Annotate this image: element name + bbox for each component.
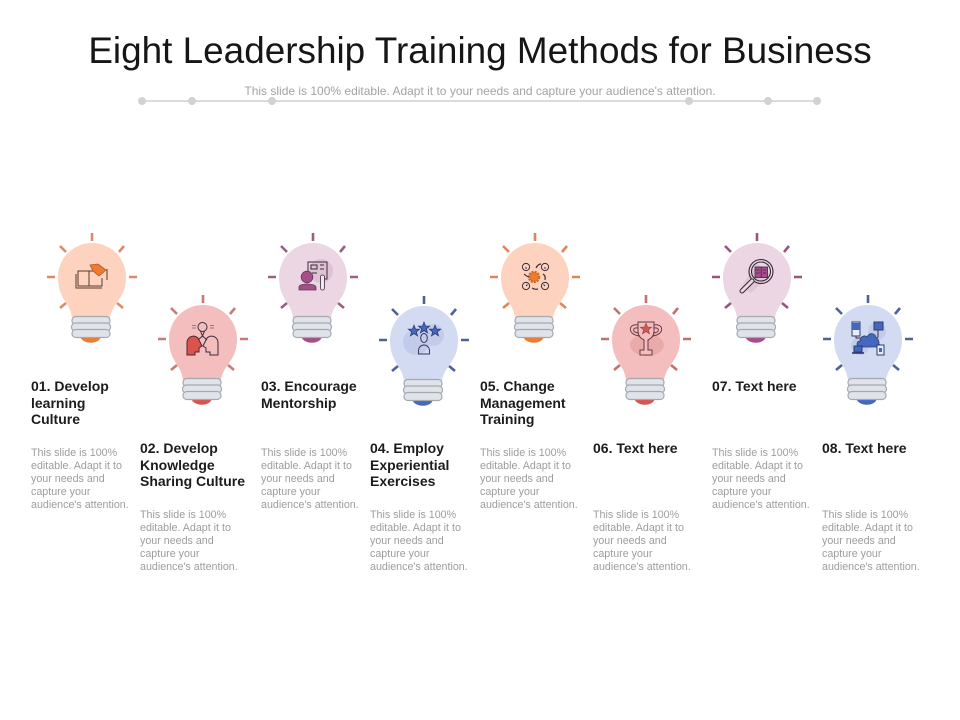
icon: person with board <box>299 262 327 290</box>
item 07 heading: 07. Text here <box>712 378 797 394</box>
item 02 text: capture your <box>140 548 199 560</box>
item 04 text <box>370 509 468 573</box>
item 07 text: This slide is 100% <box>712 447 798 459</box>
bulb 7: magnifier and book <box>712 233 802 343</box>
item 05 text: capture your <box>480 486 539 498</box>
item 01 text: audience's attention. <box>31 499 129 511</box>
item 05 heading: Management <box>480 394 566 410</box>
icon: trophy <box>630 322 662 355</box>
bulb 1: book and graduation cap <box>47 233 137 343</box>
item 02 text <box>140 509 238 573</box>
item 04 heading: 04. Employ <box>370 440 444 456</box>
item 03 heading: Mentorship <box>261 394 336 410</box>
bulb 6: trophy <box>601 295 691 405</box>
item 05 text: editable. Adapt it to <box>480 460 571 472</box>
item 02 heading: Knowledge <box>140 456 215 472</box>
item 08 text: editable. Adapt it to <box>822 522 913 534</box>
bulb 3: mentor board <box>268 233 358 343</box>
item 02 text: audience's attention. <box>140 561 238 573</box>
item 01 text: editable. Adapt it to <box>31 460 122 472</box>
item 04 heading: Exercises <box>370 473 435 489</box>
item 01 text: your needs and <box>31 473 105 485</box>
item 07 text: editable. Adapt it to <box>712 460 803 472</box>
item 06 heading: 06. Text here <box>593 440 678 456</box>
item 02 heading: 02. Develop <box>140 440 218 456</box>
item 07 text <box>712 447 810 511</box>
item 03 heading: 03. Encourage <box>261 378 357 394</box>
item 05 text: audience's attention. <box>480 499 578 511</box>
item 08 text: audience's attention. <box>822 561 920 573</box>
item 05 text <box>480 447 578 511</box>
item 02 text: editable. Adapt it to <box>140 522 231 534</box>
item 05 heading <box>480 378 566 427</box>
item 05 text: your needs and <box>480 473 554 485</box>
icon: book and cap <box>76 264 107 288</box>
item 04 heading <box>370 440 449 489</box>
item 07 text: audience's attention. <box>712 499 810 511</box>
bulb 4: stars over person <box>379 296 469 406</box>
item 06 text: your needs and <box>593 535 667 547</box>
item 02 text: your needs and <box>140 535 214 547</box>
item 01 text: capture your <box>31 486 90 498</box>
item 04 text: capture your <box>370 548 429 560</box>
item 04 heading: Experiential <box>370 456 449 472</box>
item 08 heading: 08. Text here <box>822 440 907 456</box>
item 05 text: This slide is 100% <box>480 447 566 459</box>
item 03 text: capture your <box>261 486 320 498</box>
item 05 heading: 05. Change <box>480 378 555 394</box>
item 08 text: This slide is 100% <box>822 509 908 521</box>
item 05 heading: Training <box>480 411 534 427</box>
title: Eight Leadership Training Methods for Business <box>88 30 872 71</box>
icon: two heads and light bulb <box>187 322 218 355</box>
item 02 text: This slide is 100% <box>140 509 226 521</box>
item 07 text: capture your <box>712 486 771 498</box>
item 06 text: capture your <box>593 548 652 560</box>
item 01 heading: learning <box>31 394 85 410</box>
item 04 text: This slide is 100% <box>370 509 456 521</box>
item 03 text: your needs and <box>261 473 335 485</box>
item 08 text <box>822 509 920 573</box>
item 04 text: editable. Adapt it to <box>370 522 461 534</box>
item 08 text: capture your <box>822 548 881 560</box>
item 06 text: editable. Adapt it to <box>593 522 684 534</box>
item 06 text: audience's attention. <box>593 561 691 573</box>
item 03 text: editable. Adapt it to <box>261 460 352 472</box>
bulb 2: sharing knowledge heads <box>158 295 248 405</box>
item 01 heading <box>31 378 109 427</box>
item 04 text: your needs and <box>370 535 444 547</box>
item 06 text: This slide is 100% <box>593 509 679 521</box>
item 03 text: This slide is 100% <box>261 447 347 459</box>
bulb 5: change management cycle <box>490 233 580 343</box>
item 03 text: audience's attention. <box>261 499 359 511</box>
item 03 heading <box>261 378 357 411</box>
item 03 text <box>261 447 359 511</box>
subtitle timeline <box>138 97 821 105</box>
icon: magnifier <box>742 260 773 291</box>
subtitle: This slide is 100% editable. Adapt it to your needs and capture your audience's attention. <box>244 84 716 98</box>
item 01 text: This slide is 100% <box>31 447 117 459</box>
item 02 heading <box>140 440 245 489</box>
icon: cloud and devices <box>852 322 884 355</box>
bulb 8: cloud network <box>823 295 913 405</box>
item 01 heading: 01. Develop <box>31 378 109 394</box>
item 01 text <box>31 447 129 511</box>
item 02 heading: Sharing Culture <box>140 473 245 489</box>
icon: gear and cycle <box>522 263 549 290</box>
item 04 text: audience's attention. <box>370 561 468 573</box>
icon: stars and person <box>408 322 441 354</box>
item 08 text: your needs and <box>822 535 896 547</box>
item 07 text: your needs and <box>712 473 786 485</box>
item 06 text <box>593 509 691 573</box>
item 01 heading: Culture <box>31 411 80 427</box>
